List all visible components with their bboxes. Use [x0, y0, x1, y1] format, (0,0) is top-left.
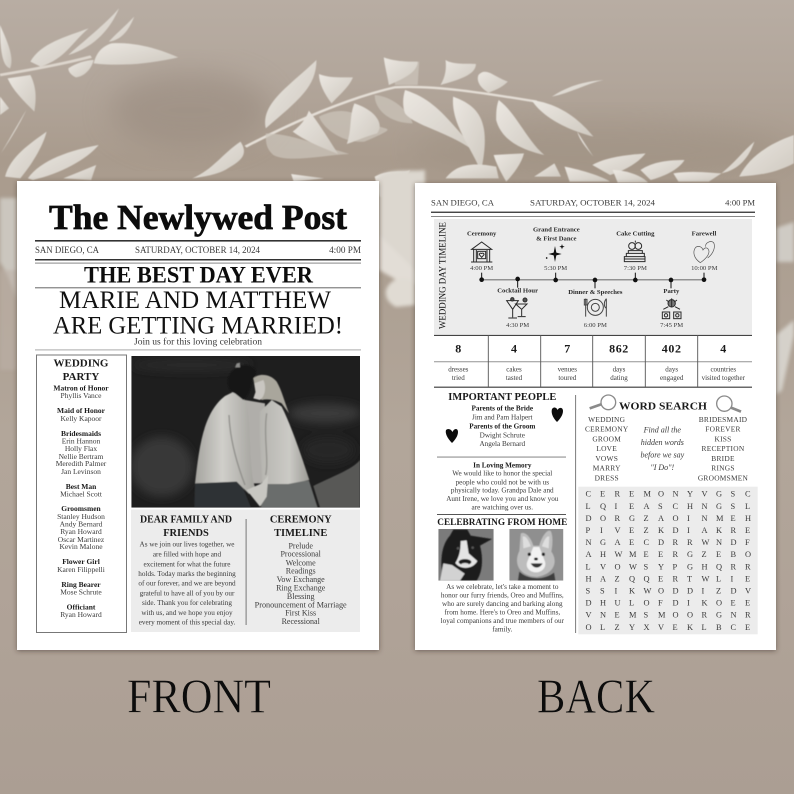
list: wedding party names: Best Man [66, 482, 97, 491]
event: cake cutting: Cake Cutting [616, 231, 655, 238]
list: words right: RECEPTION [702, 444, 745, 453]
panel: letter and ceremony timeline [131, 510, 360, 632]
heading: celebrating from home: CELEBRATING FROM HOME [437, 517, 567, 528]
text block: furry friends: who are surely dancing and barking along [442, 600, 563, 608]
list: words right: FOREVER [705, 425, 741, 434]
stat: countries visited together [702, 342, 746, 382]
instruction text: hidden words [641, 438, 684, 447]
instruction text [640, 425, 685, 472]
event: cocktail hour: 4:30 PM [506, 322, 529, 329]
list: wedding party names: Karen Filippelli [57, 565, 105, 574]
icon: heart right [552, 407, 563, 422]
text block: letter to guests [138, 541, 236, 627]
photo: corgi [509, 529, 563, 581]
text block: furry friends: from home. Here's to Oreo and Muffins, [444, 609, 560, 617]
text block: in loving memory: are watching over us. [472, 504, 533, 512]
list: ceremony order: Prelude [288, 541, 313, 550]
list: wedding party names: Holly Flax [65, 444, 97, 453]
text block: letter to guests: grateful to have all of you by our [140, 589, 235, 597]
panel: important people [446, 392, 563, 448]
text block: in loving memory [446, 461, 559, 512]
text block: in loving memory: people who could not be with us [456, 478, 549, 486]
list: ceremony order: Recessional [282, 617, 321, 626]
list: wedding party names: Mose Schrute [60, 588, 102, 597]
list: words left: LOVE [596, 444, 617, 453]
headline: couple names: MARIE AND MATTHEW [59, 287, 331, 314]
word search grid: DHULOFDIKOEE [586, 599, 750, 608]
stat: dresses tried: 8 [455, 342, 461, 356]
word search grid: AHWMEERGZEBO [586, 550, 751, 559]
heading: wedding party: PARTY [63, 371, 99, 383]
list: parents: Parents of the Groom [469, 422, 535, 430]
stat: days dating: days [613, 365, 626, 373]
strips visible beside and between the cards [0, 170, 794, 395]
word search grid: OLZYXVEKLBCE [586, 623, 750, 632]
background: white dried foliage [0, 8, 794, 395]
list: words right: GROOMSMEN [698, 474, 749, 483]
icon: magnifying glass right [717, 396, 741, 412]
list: ceremony order: Welcome [286, 558, 316, 567]
instruction text: "I Do"! [650, 463, 675, 472]
text block: letter to guests: As we join our lives together, we [140, 541, 234, 549]
list: words right: BRIDESMAID [699, 415, 748, 424]
stat: countries visited together: 4 [720, 342, 726, 356]
event: grand entrance and first dance [533, 226, 580, 282]
event: farewell: 10:00 PM [691, 265, 718, 272]
event: party [660, 278, 683, 329]
event: party: Party [663, 288, 680, 295]
headline: couple names: ARE GETTING MARRIED! [53, 313, 343, 340]
stat: cakes tasted: tasted [506, 374, 523, 382]
panel: wedding party [36, 355, 126, 632]
timeline axis [482, 279, 704, 280]
list: words left: CEREMONY [585, 425, 629, 434]
icon: plate and cutlery [584, 299, 606, 317]
list: wedding party names: Maid of Honor [57, 406, 106, 415]
list: parents: Angela Bernard [479, 440, 526, 448]
stat: venues toured: 7 [564, 342, 570, 356]
list: wedding party names [53, 384, 109, 619]
event: cake cutting: 7:30 PM [624, 265, 647, 272]
heading: wedding party [53, 358, 109, 383]
stat: days engaged: engaged [660, 374, 684, 382]
heading: ceremony timeline [270, 515, 332, 539]
photo: couple kissing [130, 356, 362, 508]
list: ceremony order: First Kiss [285, 609, 316, 618]
list: wedding party names: Ryan Howard [60, 527, 102, 536]
event: ceremony: 4:00 PM [470, 265, 493, 272]
list: wedding party names: Kelly Kapoor [60, 414, 102, 423]
word search grid: DORGZAOINMEH [586, 514, 751, 523]
stat: days engaged: 402 [662, 342, 682, 356]
event: ceremony [467, 231, 497, 282]
stat: cakes tasted [506, 342, 523, 382]
dateline: front: SATURDAY, OCTOBER 14, 2024 [135, 245, 260, 255]
event: cocktail hour: Cocktail Hour [497, 288, 538, 295]
list: wedding party names: Matron of Honor [53, 384, 109, 393]
stat: venues toured: venues [558, 365, 577, 373]
word search grid: PIVEZKDIAKRE [586, 526, 750, 535]
list: wedding party names: Andy Bernard [60, 520, 103, 529]
panel: celebrating from home [437, 517, 567, 633]
dateline: back [431, 198, 755, 217]
word search grid: LVOWSYPGHQRR [586, 562, 751, 571]
headline: the best day ever: THE BEST DAY EVER [84, 263, 313, 288]
heading: word search: WORD SEARCH [619, 400, 707, 412]
event: farewell: Farewell [692, 231, 716, 238]
event: party: 7:45 PM [660, 322, 683, 329]
list: parents: Jim and Pam Halpert [472, 414, 533, 422]
icon: magnifying glass left [590, 395, 616, 410]
list: wedding party names: Michael Scott [60, 490, 103, 499]
event: dinner and speeches [568, 278, 623, 329]
text block: furry friends: honor our furry friends, Oreo and Muffins, [441, 592, 564, 600]
subheading: invitation line: Join us for this loving celebration [134, 336, 263, 346]
stat: cakes tasted: cakes [506, 365, 522, 373]
dateline: back: 4:00 PM [725, 198, 755, 208]
dateline: front: 4:00 PM [329, 245, 361, 255]
list: words left: WEDDING [588, 415, 626, 424]
list: parents: Parents of the Bride [472, 405, 533, 413]
text block: furry friends: As we celebrate, let's take a moment to [446, 583, 559, 591]
text block: in loving memory: We would like to honor the special [452, 470, 552, 478]
dateline: front [35, 240, 361, 264]
stat: countries visited together: visited together [702, 374, 746, 382]
icon: party dancers [662, 298, 681, 319]
heading: ceremony timeline: CEREMONY [270, 515, 332, 526]
list: wedding party names: Meredith Palmer [56, 459, 107, 468]
list: ceremony order: Processional [280, 550, 322, 559]
text block: letter to guests: with us, and we hope you enjoy [141, 609, 233, 617]
event: grand entrance and first dance: & First Dance [536, 235, 577, 242]
text block: letter to guests: are filled with hope and [153, 551, 222, 559]
text block: furry friends [441, 583, 565, 633]
photo: border collie [438, 529, 494, 581]
list: ceremony order [255, 541, 347, 626]
masthead: The Newlywed Post: The Newlywed Post [49, 198, 347, 237]
list: words left: DRESS [595, 474, 619, 483]
list: words left: MARRY [593, 464, 621, 473]
stat: venues toured [558, 342, 577, 382]
text block: in loving memory: physically today. Grandpa Dale and [451, 486, 554, 494]
list: words right: BRIDE [711, 454, 735, 463]
list: wedding party names: Oscar Martinez [58, 535, 105, 544]
list: words right: KISS [714, 435, 732, 444]
word search grid: NGAECDRRWNDF [586, 538, 750, 547]
text block: letter to guests: side. Thank you for celebrating [142, 599, 232, 607]
panel: word search [578, 395, 758, 634]
word search grid: LQIEASCHNGSL [586, 502, 750, 511]
stat: countries visited together: countries [710, 365, 736, 373]
event: farewell [691, 231, 718, 282]
list: wedding party names: Erin Hannon [62, 437, 101, 446]
list: ceremony order: Vow Exchange [277, 575, 325, 584]
event: grand entrance and first dance: Grand Entrance [533, 226, 580, 233]
timeline chart [467, 226, 718, 329]
list: words left [585, 415, 629, 483]
text block: letter to guests: of our forever, and we are beyond [138, 580, 236, 588]
list: wedding party names: Ryan Howard [60, 610, 102, 619]
text block: furry friends: family. [492, 625, 513, 633]
event: cake cutting [616, 231, 655, 282]
text block: letter to guests: holds. Today marks the beginning [138, 570, 236, 578]
list: words right: RINGS [711, 464, 735, 473]
text block: furry friends: loyal companions and true members of our [441, 617, 565, 625]
icon: cocktail glasses [507, 298, 527, 318]
instruction text: before we say [640, 451, 685, 460]
stat: cakes tasted: 4 [511, 342, 517, 356]
label: back: BACK [537, 669, 655, 724]
heading: dear family and friends: FRIENDS [163, 528, 209, 539]
list: parents: Dwight Schrute [480, 431, 525, 439]
icon: sparkles [546, 244, 565, 262]
list: wedding party names: Nellie Bertram [59, 452, 104, 461]
list: ceremony order: Blessing [287, 592, 314, 601]
list: ceremony order: Pronouncement of Marriage [255, 600, 347, 609]
word search grid: HAZQQERTWLIE [586, 574, 750, 583]
list: wedding party names: Ring Bearer [61, 580, 101, 589]
heading: wedding day timeline: WEDDING DAY TIMELINE [438, 222, 448, 329]
dateline: back: SAN DIEGO, CA [431, 198, 495, 208]
stat: days dating [609, 342, 629, 382]
word search grid [578, 487, 758, 634]
panel: wedding day timeline [434, 219, 752, 334]
stat: dresses tried: dresses [448, 365, 469, 373]
text block: letter to guests: every moment of this special day. [139, 619, 235, 627]
event: dinner and speeches: Dinner & Speeches [568, 289, 623, 296]
list: wedding party names: Groomsmen [61, 504, 102, 513]
headline: couple names [53, 287, 343, 340]
stats table [434, 335, 752, 388]
event: ceremony: Ceremony [467, 231, 497, 238]
heading: wedding party: WEDDING [53, 358, 109, 370]
dateline: front: SAN DIEGO, CA [35, 245, 99, 255]
list: wedding party names: Flower Girl [62, 557, 100, 566]
heading: ceremony timeline: TIMELINE [274, 528, 327, 539]
label: front: FRONT [127, 669, 271, 724]
icon: chapel with heart [471, 242, 492, 262]
event: grand entrance and first dance: 5:30 PM [544, 265, 567, 272]
text block: in loving memory: In Loving Memory [473, 461, 532, 469]
word search grid: VNEMSMOORGNR [586, 611, 751, 620]
stat: days engaged [660, 342, 684, 382]
icon: two hearts [694, 242, 714, 263]
list: words left: GROOM [592, 435, 621, 444]
event: cocktail hour [497, 277, 538, 329]
list: ceremony order: Ring Exchange [276, 583, 326, 592]
list: ceremony order: Readings [286, 567, 316, 576]
text block: in loving memory: Aunt Irene, we love you and know you [446, 495, 559, 503]
list: wedding party names: Bridesmaids [61, 429, 101, 438]
stat: venues toured: toured [558, 374, 577, 382]
word search grid: SSIKWODDIZDV [586, 586, 751, 596]
front page card [17, 181, 379, 650]
list: wedding party names: Kevin Malone [59, 542, 103, 551]
list: words left: VOWS [595, 454, 618, 463]
stat: dresses tried: tried [452, 374, 465, 382]
heading: important people: IMPORTANT PEOPLE [448, 392, 556, 403]
photos: two dogs [438, 529, 563, 581]
dateline: back: SATURDAY, OCTOBER 14, 2024 [530, 198, 656, 208]
word search grid: CEREMONYVGSC [586, 490, 751, 499]
list: wedding party names: Officiant [67, 603, 96, 612]
list: words right [698, 415, 749, 483]
list: wedding party names: Phyllis Vance [61, 391, 102, 400]
icon: wedding cake [624, 241, 645, 262]
icon: heart left [446, 429, 458, 443]
list: wedding party names: Stanley Hudson [57, 512, 105, 521]
back page card [415, 183, 776, 650]
instruction text: Find all the [643, 425, 681, 434]
stat: days dating: dating [610, 374, 628, 382]
heading: dear family and friends: DEAR FAMILY AND [140, 515, 232, 526]
event: dinner and speeches: 6:00 PM [584, 322, 607, 329]
text block: letter to guests: excitement for what the future [143, 560, 231, 568]
list: parents [469, 405, 535, 448]
stat: days dating: 862 [609, 342, 629, 356]
stat: dresses tried [448, 342, 469, 382]
heading: dear family and friends [140, 515, 232, 539]
list: wedding party names: Jan Levinson [61, 467, 101, 476]
stat: days engaged: days [665, 365, 678, 373]
